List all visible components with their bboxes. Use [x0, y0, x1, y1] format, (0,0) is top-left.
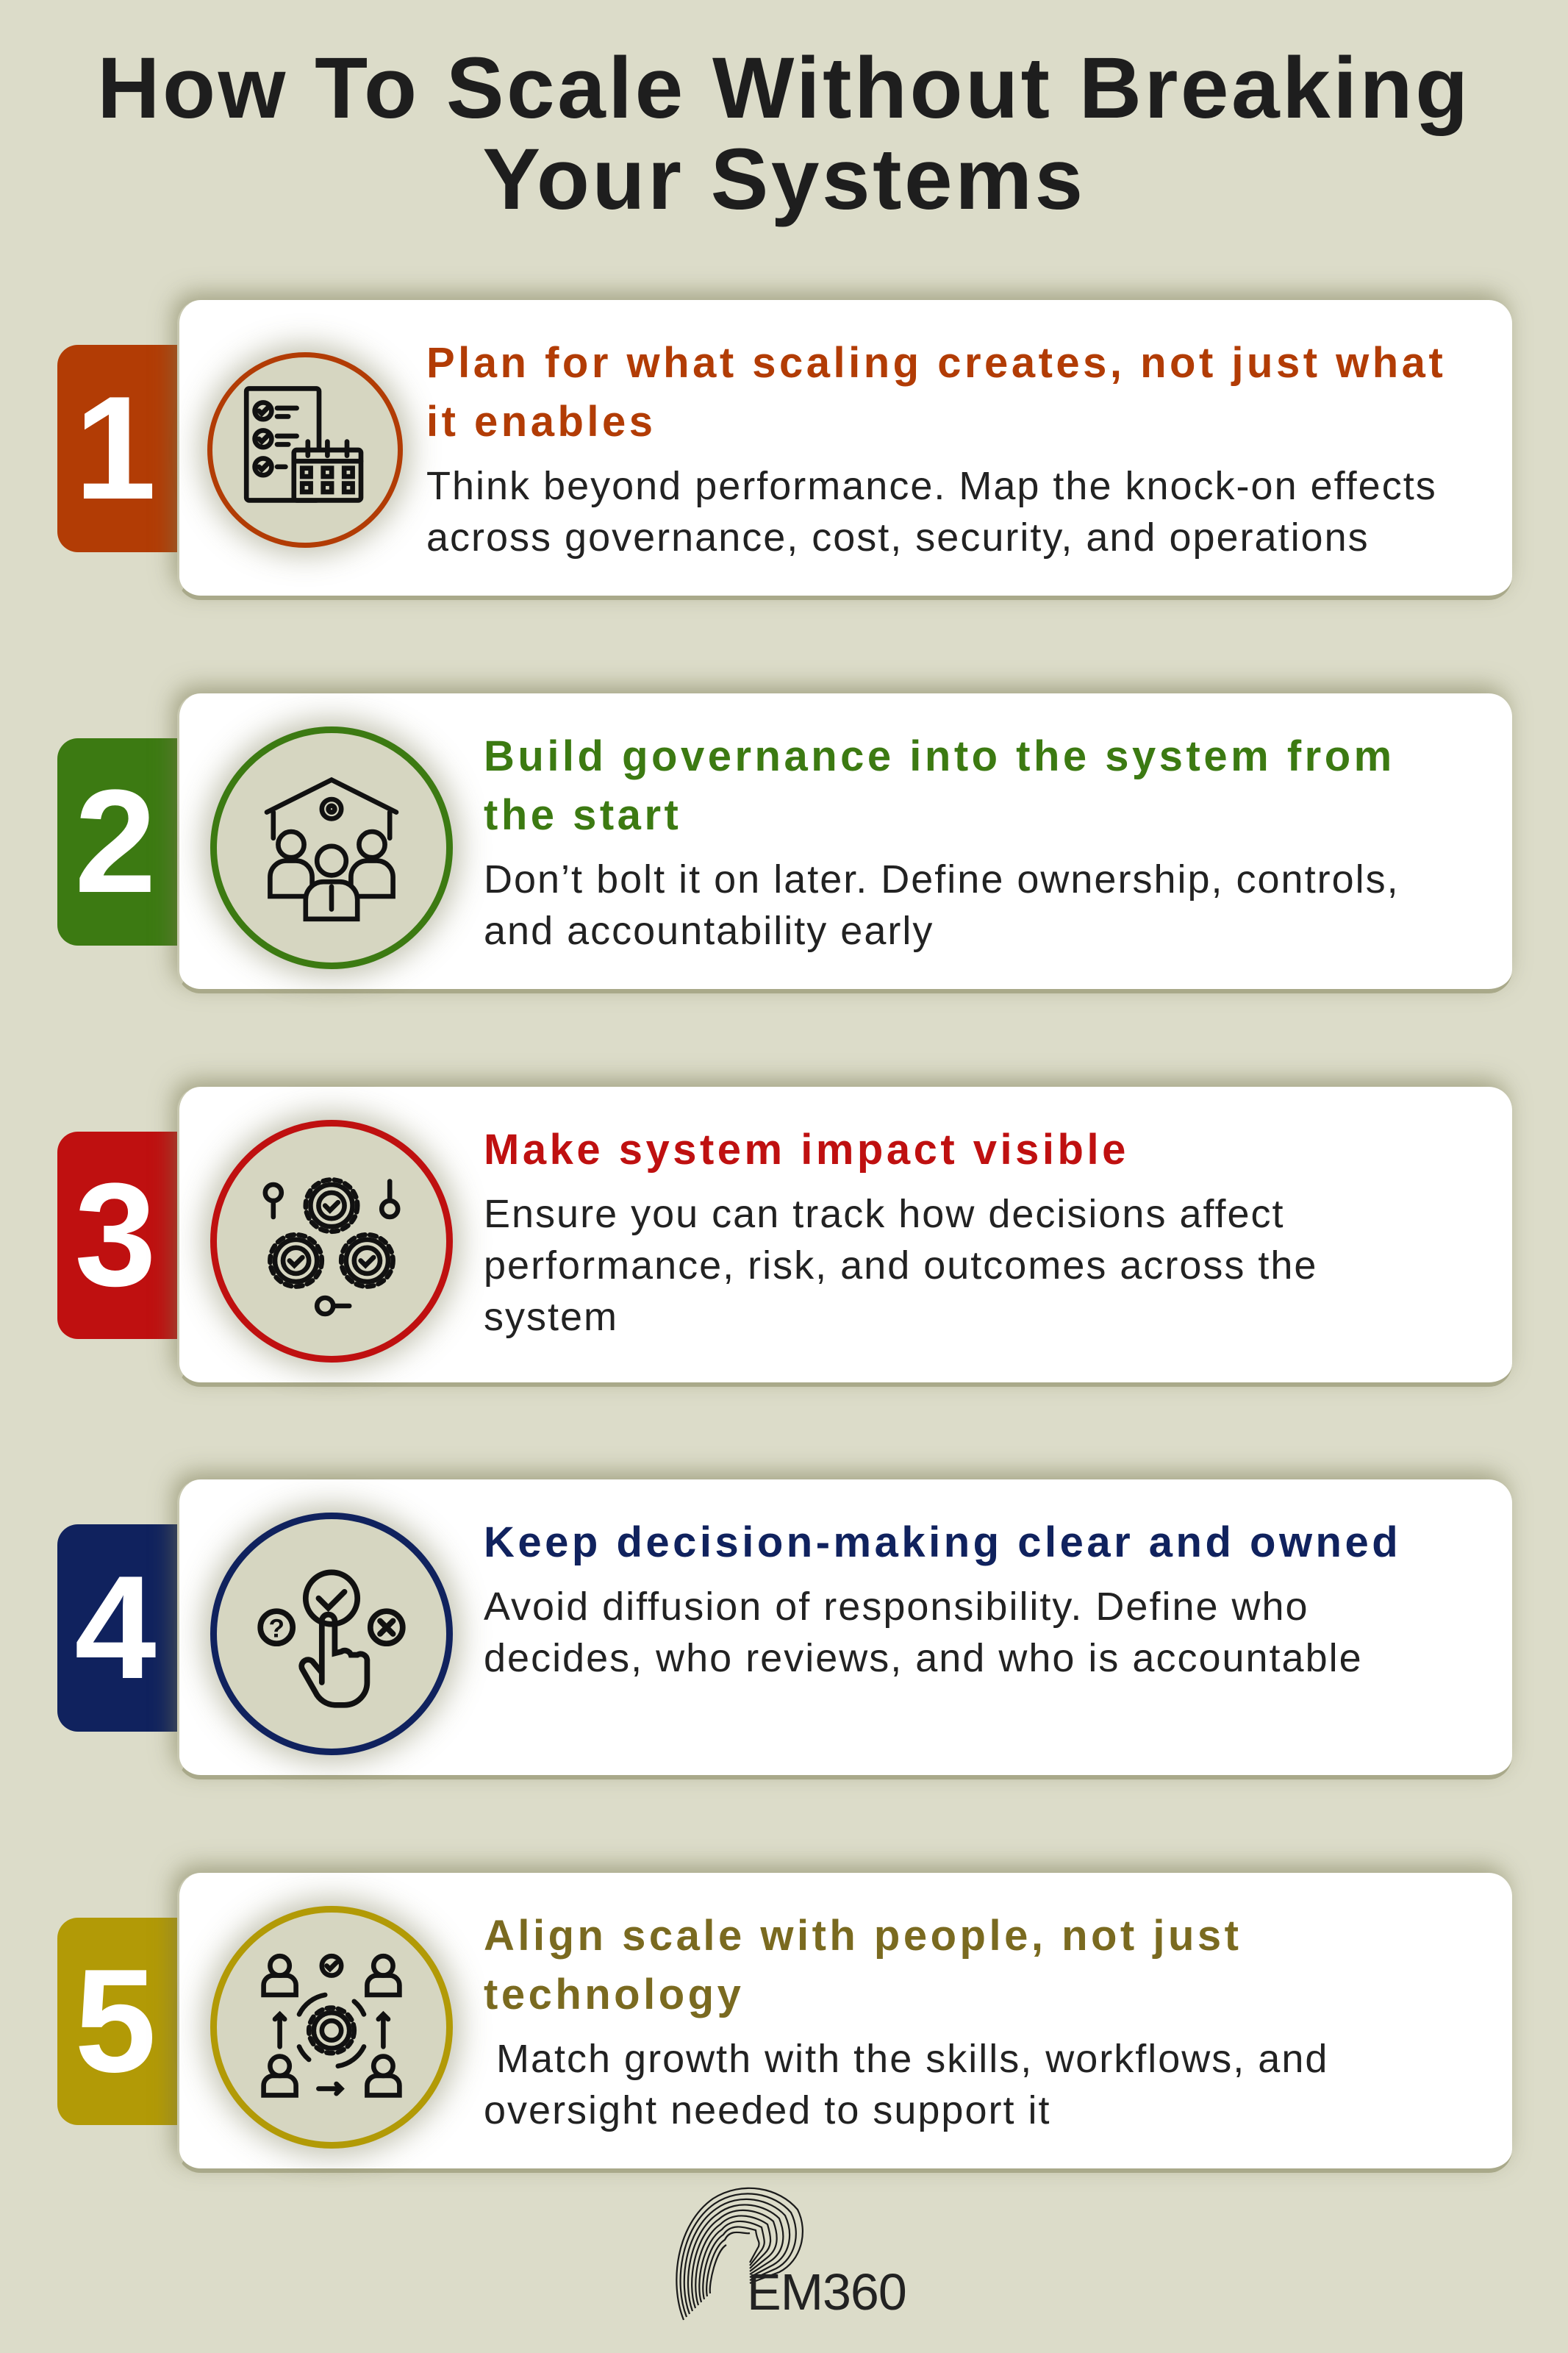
text: step 1: Plan for what scaling creates, not just what it enables	[426, 339, 1446, 446]
icon: checklist calendar	[207, 352, 403, 548]
text: step 5	[484, 1912, 1328, 2132]
icon: decision hand: ?	[268, 1614, 284, 1643]
tab 2	[57, 738, 181, 946]
text: step 3: Ensure you can track how decisions affect performance, risk, and outcomes across the system	[484, 1192, 1317, 1339]
title: Your Systems	[482, 131, 1086, 228]
text: step 2	[484, 732, 1400, 953]
text: step 4: Keep decision-making clear and owned	[484, 1518, 1401, 1566]
tab 4	[57, 1524, 181, 1732]
text: step 2: Build governance into the system from the start	[484, 732, 1395, 839]
panel: step 5	[177, 1873, 1512, 2173]
text: step 4	[484, 1518, 1401, 1680]
icon: people and gear	[210, 1906, 453, 2149]
text: step 5: Match growth with the skills, workflows, and oversight needed to support it	[484, 2037, 1328, 2132]
text: step 1: Think beyond performance. Map the knock-on effects across governance, cost, security, and operations	[426, 464, 1437, 560]
panel: step 2	[177, 693, 1512, 993]
icon: gears with checks	[210, 1120, 453, 1363]
text: step 3	[484, 1126, 1317, 1339]
tab 4: 4	[74, 1546, 157, 1710]
tab 2: 2	[74, 760, 157, 924]
title	[97, 40, 1471, 228]
tab 1: 1	[74, 366, 157, 530]
logo: EM360	[676, 2187, 906, 2321]
icon: logo swirl	[676, 2187, 803, 2321]
text: step 2: Don’t bolt it on later. Define ownership, controls, and accountability early	[484, 857, 1400, 953]
text: step 5: Align scale with people, not just technology	[484, 1912, 1242, 2018]
tab 3: 3	[74, 1153, 157, 1317]
text: step 4: Avoid diffusion of responsibility. Define who decides, who reviews, and who is accountable	[484, 1585, 1363, 1680]
tab 3	[57, 1132, 181, 1339]
title: How To Scale Without Breaking	[97, 40, 1471, 137]
tab 1	[57, 345, 181, 552]
text: step 1	[426, 339, 1446, 560]
panel: step 3	[177, 1087, 1512, 1387]
icon: decision hand	[210, 1513, 453, 1755]
tab 5	[57, 1918, 181, 2125]
icon: governance team	[210, 726, 453, 969]
text: step 3: Make system impact visible	[484, 1126, 1129, 1174]
panel: step 1	[177, 300, 1512, 600]
text: EM360 wordmark: EM360	[747, 2263, 906, 2321]
panel: step 4	[177, 1479, 1512, 1779]
tab 5: 5	[74, 1939, 157, 2103]
